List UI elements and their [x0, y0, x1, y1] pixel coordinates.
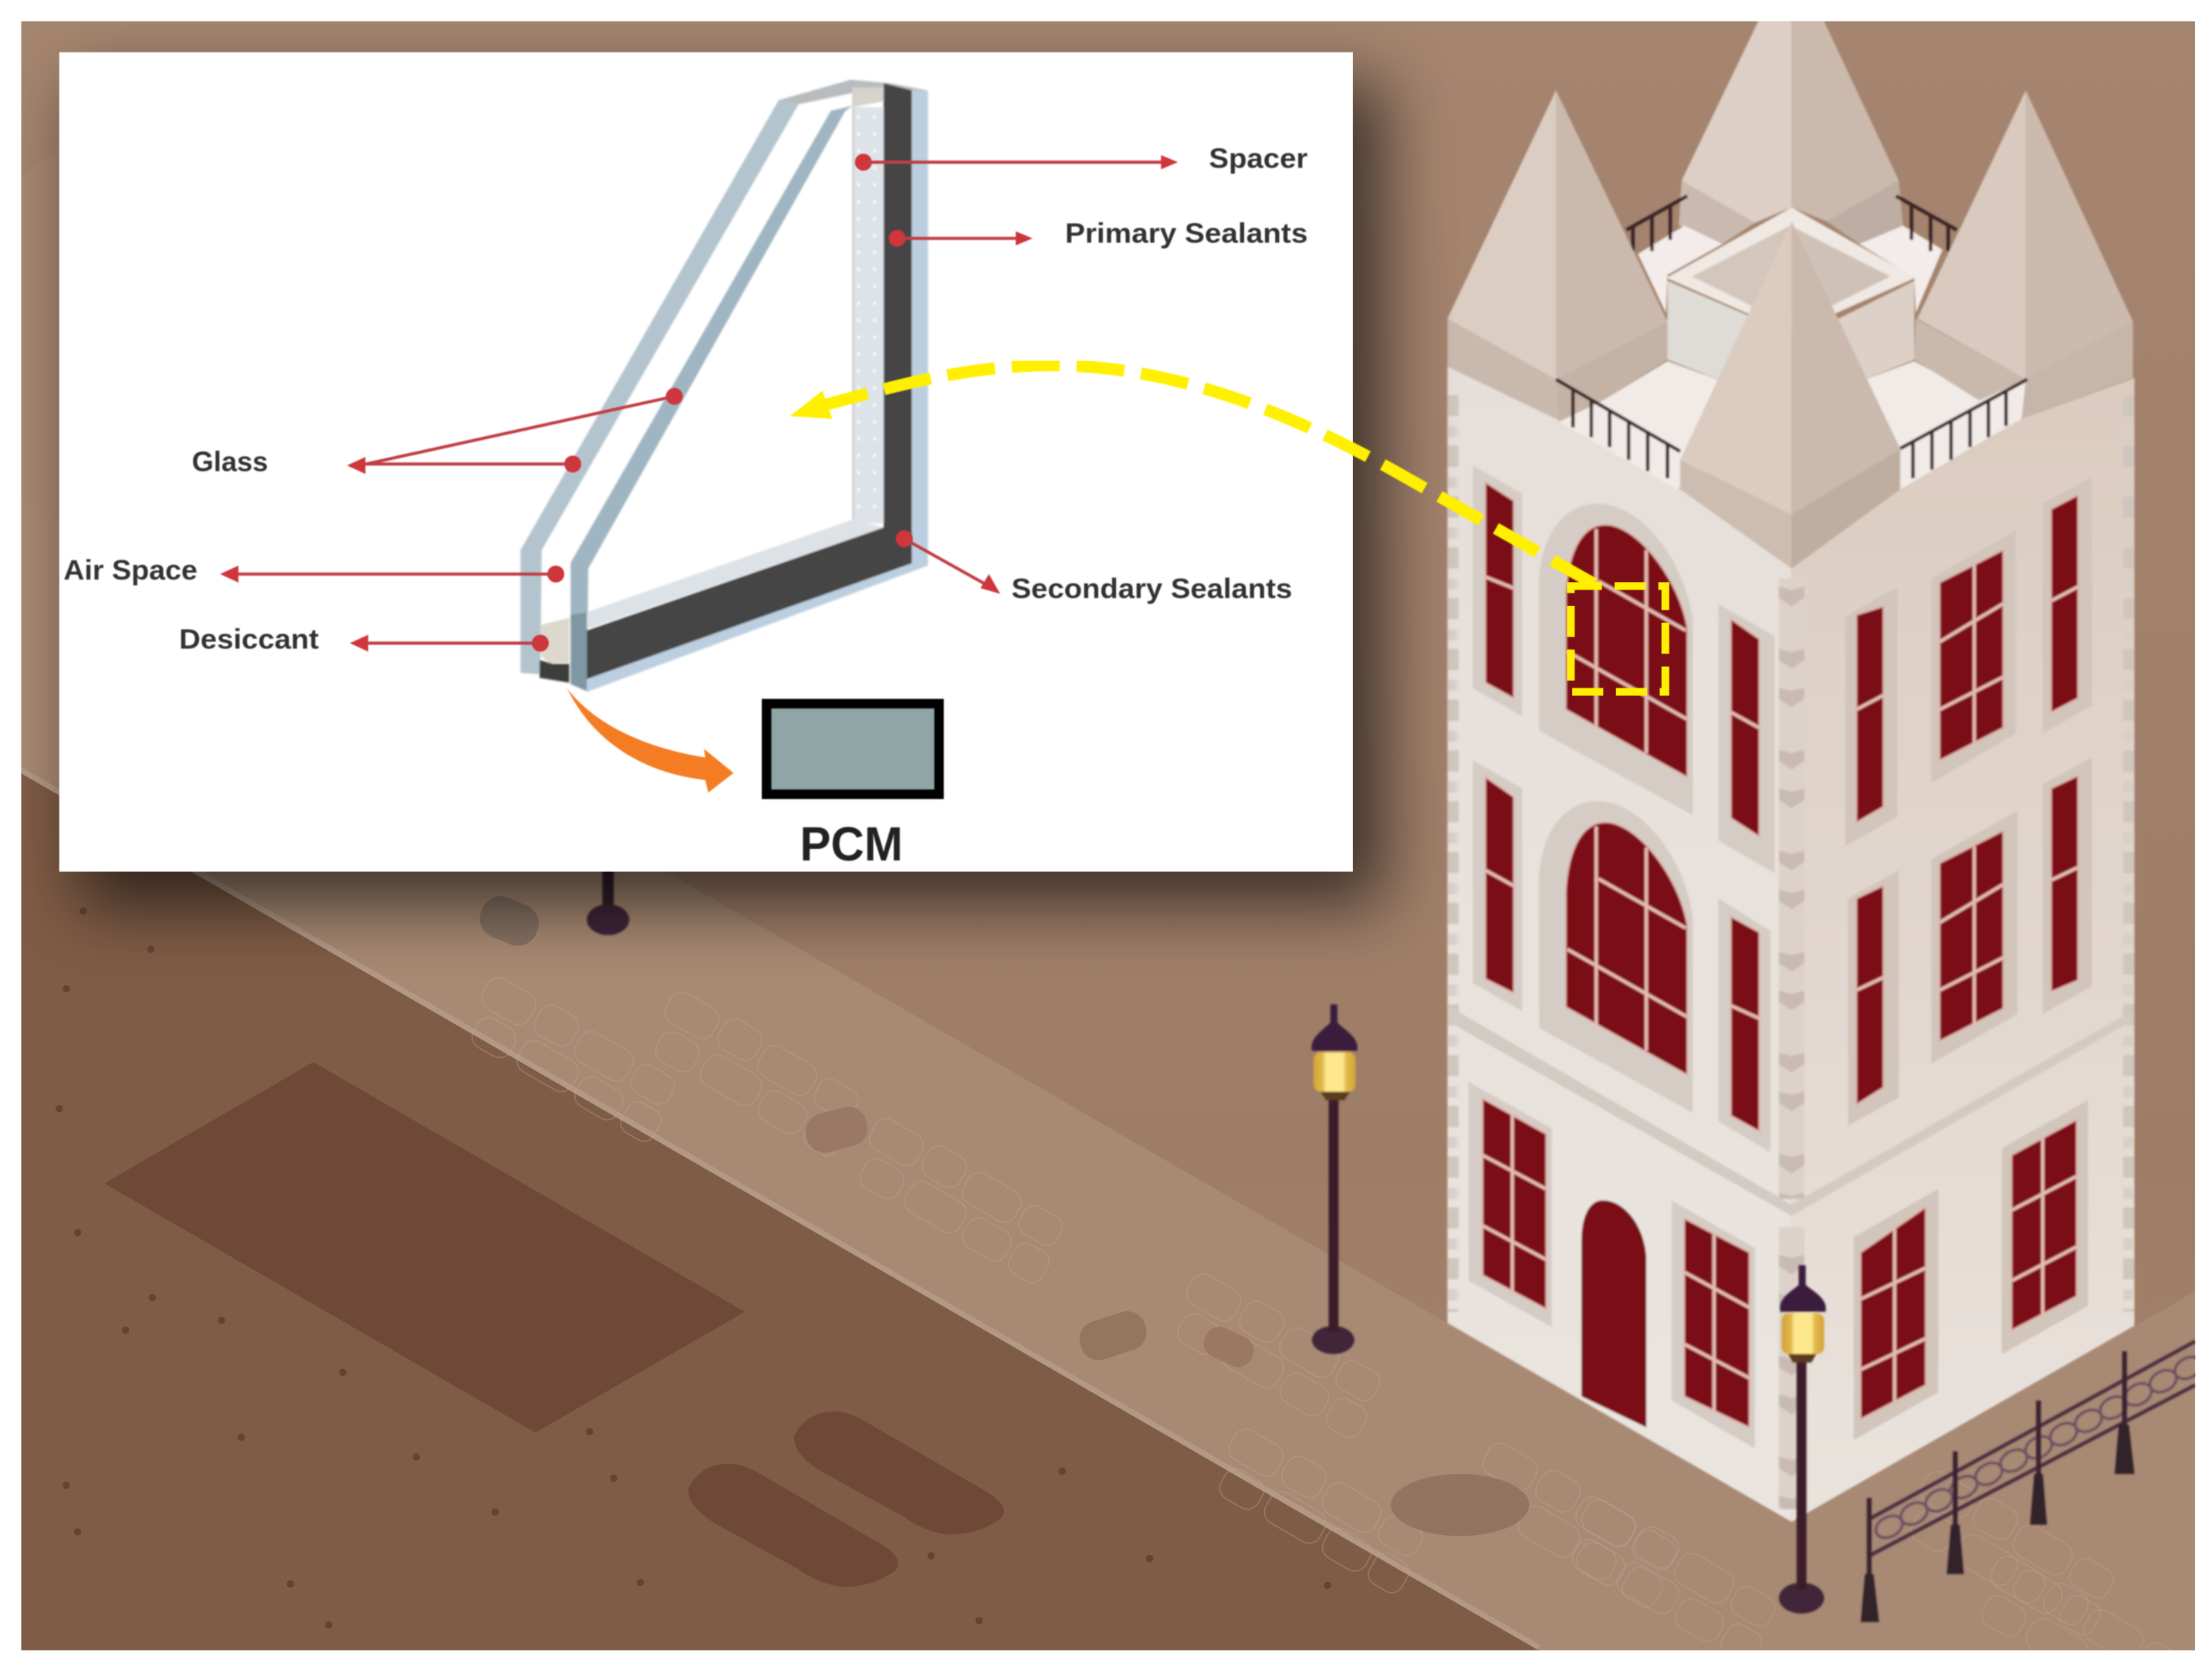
- window cross section diagram: [520, 79, 928, 692]
- right face windows: [1845, 477, 2092, 1440]
- floor divider band: [1447, 1006, 2132, 1215]
- arrow: orange curved arrow to PCM: [567, 688, 733, 793]
- front left railing: [1556, 380, 1680, 478]
- arched window lower: [1539, 801, 1693, 1113]
- street lamp in front of tower: [1779, 1265, 1826, 1614]
- top spacer corner: [852, 87, 890, 107]
- label: Primary Sealants: Primary Sealants: [1065, 217, 1307, 248]
- desiccant corner: [541, 618, 570, 663]
- label: Glass: Glass: [192, 445, 268, 477]
- panel drop shadow: [79, 82, 1384, 905]
- vertical spacer: [853, 107, 884, 523]
- left terrace floor: [1559, 361, 1730, 489]
- paving pattern: [458, 971, 2195, 1670]
- arched window upper: [1539, 503, 1693, 815]
- inner glass pane: [570, 106, 852, 691]
- door: [1581, 1200, 1646, 1428]
- narrow window R3: [2043, 477, 2092, 733]
- corner sealant: [539, 660, 570, 683]
- left corner pyramid: [1447, 90, 1667, 421]
- label: Desiccant: Desiccant: [179, 624, 319, 655]
- ground floor grid window left: [1469, 1082, 1552, 1327]
- narrow window upper left: [1473, 465, 1522, 716]
- PCM sample box: [766, 704, 939, 794]
- ground floor grid window R7: [1854, 1189, 1938, 1440]
- road pill marking lower: [688, 1464, 898, 1587]
- narrow window middle left: [1473, 760, 1522, 1011]
- right glass column: [587, 90, 928, 692]
- sidewalk curb line: [21, 770, 1539, 1648]
- panel labels and PCM callout: [63, 142, 1307, 871]
- label: Secondary Sealants: [896, 530, 1292, 604]
- top edge of panes: [779, 79, 927, 104]
- road speckles: [56, 908, 1331, 1628]
- PCM label: PCM: [800, 818, 903, 871]
- right wall: [1791, 378, 2134, 1522]
- left face windows: [1469, 465, 1774, 1449]
- label: Spacer: [855, 142, 1307, 174]
- right corner pyramid: [1914, 90, 2133, 419]
- back terrace floors: [1638, 225, 1943, 313]
- inner pane corner overlap: [570, 612, 587, 691]
- back left railing: [1626, 196, 1687, 251]
- front pyramid: [1680, 221, 1900, 569]
- building tower: [1447, 0, 2134, 1522]
- iron fence: [1861, 1341, 2205, 1622]
- vertical primary sealant: [884, 83, 912, 563]
- panel: double glazing cross section: [59, 52, 1353, 872]
- street lamp left of tower: [1311, 1004, 1358, 1354]
- narrow window R4: [1848, 870, 1899, 1126]
- central chimney: [1666, 208, 1916, 384]
- far-left ground tint: [21, 148, 59, 522]
- label: Air Space: [63, 554, 564, 586]
- road parking patch: [104, 1062, 745, 1432]
- narrow window next to corner lower: [1718, 898, 1771, 1152]
- back pyramid: [1679, 0, 1903, 244]
- sidewalk: [21, 499, 2195, 1650]
- road pill marking upper: [794, 1411, 1004, 1535]
- paving stones: [474, 891, 1529, 1536]
- label: Glass: [192, 388, 683, 477]
- back right railing: [1896, 196, 1957, 251]
- grid window R5: [1931, 811, 2018, 1063]
- highlighted window area dashed square: [1571, 586, 1666, 691]
- grid window R2: [1931, 530, 2016, 783]
- outer glass pane: [520, 100, 799, 674]
- quoins: [1447, 395, 2134, 1509]
- ground floor grid window R8: [2002, 1100, 2088, 1354]
- label: Spacer: Spacer: [1209, 142, 1307, 174]
- label: Secondary Sealants: Secondary Sealants: [1012, 573, 1292, 604]
- right terrace floor: [1854, 361, 2028, 489]
- left wall: [1447, 364, 1791, 1522]
- front right railing: [1900, 380, 2028, 478]
- street lamp base below panel: [587, 847, 629, 935]
- bottom spacer: [587, 519, 884, 629]
- label: Air Space: Air Space: [63, 554, 198, 586]
- road: [21, 773, 1539, 1650]
- narrow window next to corner upper: [1718, 603, 1774, 873]
- label: Primary Sealants: [889, 217, 1307, 248]
- label: Desiccant: [179, 624, 549, 655]
- ground floor grid window right: [1672, 1200, 1755, 1449]
- narrow window R1: [1845, 587, 1897, 847]
- narrow window R6: [2043, 757, 2092, 1014]
- street furniture: [587, 847, 2205, 1622]
- bottom sealant: [587, 528, 912, 679]
- arrow: yellow dashed callout from window to panel: [790, 365, 1594, 584]
